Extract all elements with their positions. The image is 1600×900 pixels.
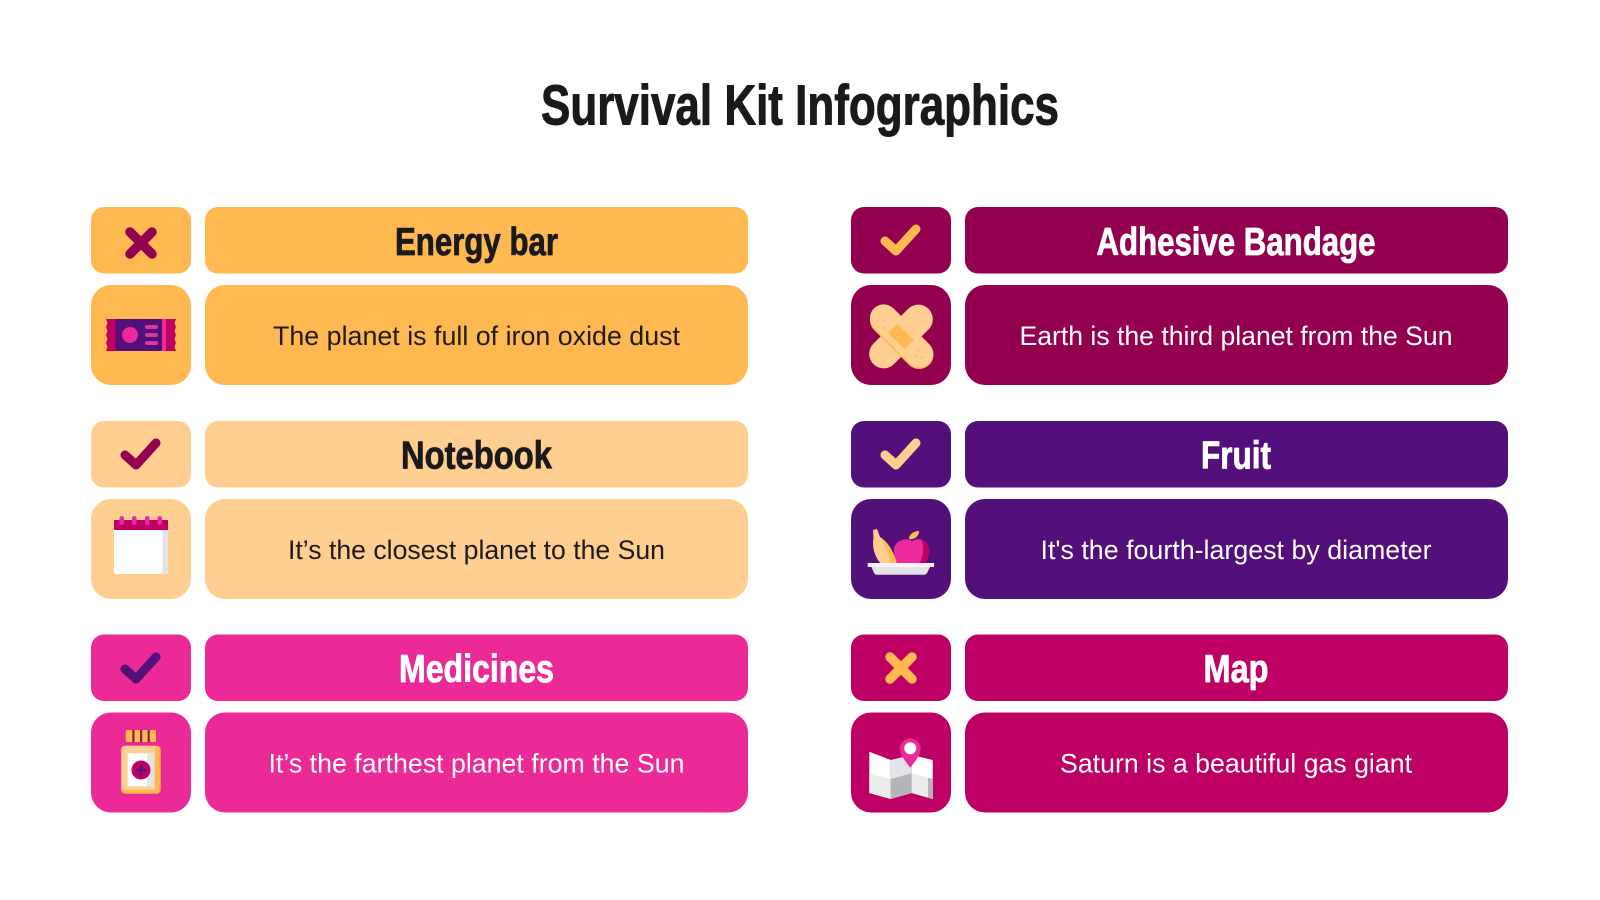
heading box: energy bar [205,207,748,274]
icon: fruit [868,529,934,575]
icon box: adhesive bandage [851,285,951,385]
heading: notebook: Notebook [401,434,552,478]
heading box: map [965,634,1508,701]
icon: check [125,443,156,465]
heading: fruit: Fruit [1201,434,1271,478]
status box: fruit [851,421,951,488]
icon: adhesive bandage [863,299,940,375]
panel: energy bar [91,207,748,385]
description: fruit: It's the fourth-largest by diameter [1040,535,1432,565]
icon box: map [851,712,951,812]
icon: cross [890,657,912,679]
description: adhesive bandage: Earth is the third planet from the Sun [1020,321,1452,351]
icon: cross [130,232,152,254]
status box: medicines [91,634,191,701]
icon: map [869,738,933,799]
description: notebook: It’s the closest planet to the Sun [288,535,665,565]
status box: map [851,634,951,701]
description: map: Saturn is a beautiful gas giant [1060,748,1412,778]
panel: medicines [91,634,748,812]
status box: notebook [91,421,191,488]
description box: fruit [965,499,1508,599]
heading: energy bar: Energy bar [395,221,558,264]
icon box: energy bar [91,285,191,385]
panel: notebook [91,421,748,599]
description box: map [965,712,1508,812]
status box: energy bar [91,207,191,274]
icon: energy bar [106,319,176,351]
panel: fruit [851,421,1508,599]
icon box: notebook [91,499,191,599]
description box: notebook [205,499,748,599]
description box: energy bar [205,285,748,385]
icon: notebook [114,516,168,574]
icon box: medicines [91,712,191,812]
status box: adhesive bandage [851,207,951,274]
description box: adhesive bandage [965,285,1508,385]
heading box: adhesive bandage [965,207,1508,274]
icon box: fruit [851,499,951,599]
description: medicines: It’s the farthest planet from the Sun [268,748,684,778]
heading box: notebook [205,421,748,488]
heading box: fruit [965,421,1508,488]
icon: check [885,229,916,251]
icon: check [125,657,156,679]
heading: medicines: Medicines [399,648,554,691]
icon: check [885,443,916,465]
icon: medicines [121,730,161,794]
description box: medicines [205,712,748,812]
panel: adhesive bandage [851,207,1508,385]
title: Survival Kit Infographics [541,74,1059,138]
heading: adhesive bandage: Adhesive Bandage [1096,221,1376,264]
panel: map [851,634,1508,812]
heading: map: Map [1204,648,1268,691]
heading box: medicines [205,634,748,701]
description: energy bar: The planet is full of iron oxide dust [273,321,680,351]
